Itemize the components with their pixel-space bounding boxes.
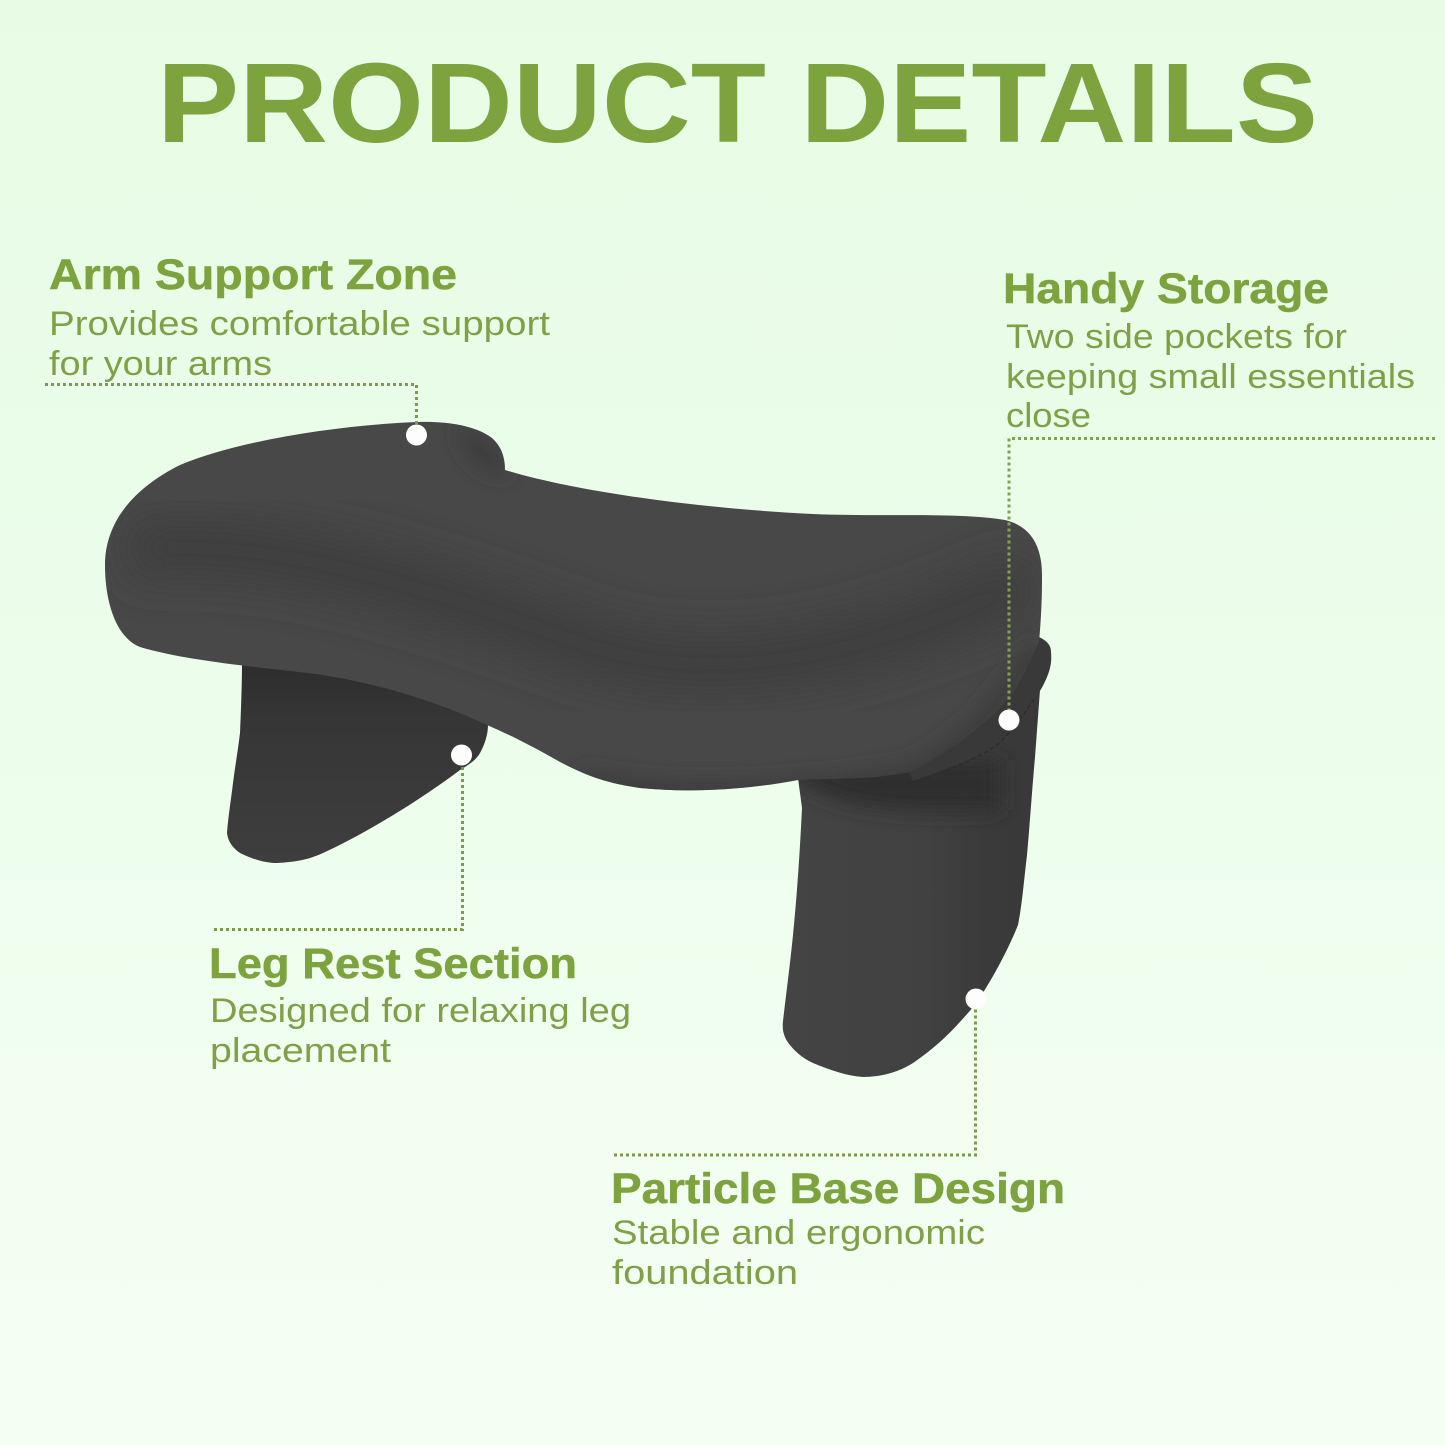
- side pocket: [909, 637, 1051, 781]
- description: leg rest section: Designed for relaxing leg: [210, 992, 631, 1030]
- description: handy storage: keeping small essentials: [1006, 358, 1415, 396]
- front right leg: [782, 691, 1040, 1077]
- shadow under seat: [790, 760, 1000, 811]
- description: handy storage: Two side pockets for: [1006, 318, 1347, 356]
- description: handy storage: close: [1006, 397, 1091, 435]
- marker dot: leg rest section: [451, 744, 472, 766]
- leader line: arm support zone: [45, 384, 416, 430]
- leader line: leg rest section: [214, 760, 462, 930]
- description: leg rest section: placement: [210, 1032, 392, 1070]
- leader line: particle base design: [614, 1004, 976, 1155]
- heading: arm support zone: Arm Support Zone: [49, 251, 457, 299]
- rear lobe shading: [463, 426, 510, 472]
- description: particle base design: Stable and ergonomic: [612, 1214, 985, 1252]
- description: arm support zone: for your arms: [49, 345, 272, 383]
- product illustration: ergonomic stool: [100, 415, 1060, 1090]
- title: PRODUCT DETAILS: [157, 40, 1318, 166]
- callout: handy storage: [998, 265, 1435, 730]
- marker dot: handy storage: [998, 710, 1020, 730]
- heading: leg rest section: Leg Rest Section: [209, 940, 577, 988]
- seat underside shading: [580, 650, 1038, 794]
- leader line: handy storage: [1009, 438, 1435, 715]
- heading: particle base design: Particle Base Design: [611, 1165, 1065, 1213]
- marker dot: arm support zone: [406, 424, 427, 446]
- back left leg: [227, 660, 488, 863]
- pocket stitching: [913, 697, 1035, 782]
- marker dot: particle base design: [966, 988, 986, 1010]
- seat cushion: [100, 415, 1050, 795]
- callout: leg rest section: [209, 744, 631, 1070]
- callout: particle base design: [611, 988, 1065, 1292]
- callout: arm support zone: [45, 251, 551, 446]
- heading: handy storage: Handy Storage: [1003, 265, 1329, 313]
- description: particle base design: foundation: [612, 1254, 798, 1292]
- description: arm support zone: Provides comfortable support: [49, 305, 551, 343]
- seat shading band: [130, 548, 1030, 664]
